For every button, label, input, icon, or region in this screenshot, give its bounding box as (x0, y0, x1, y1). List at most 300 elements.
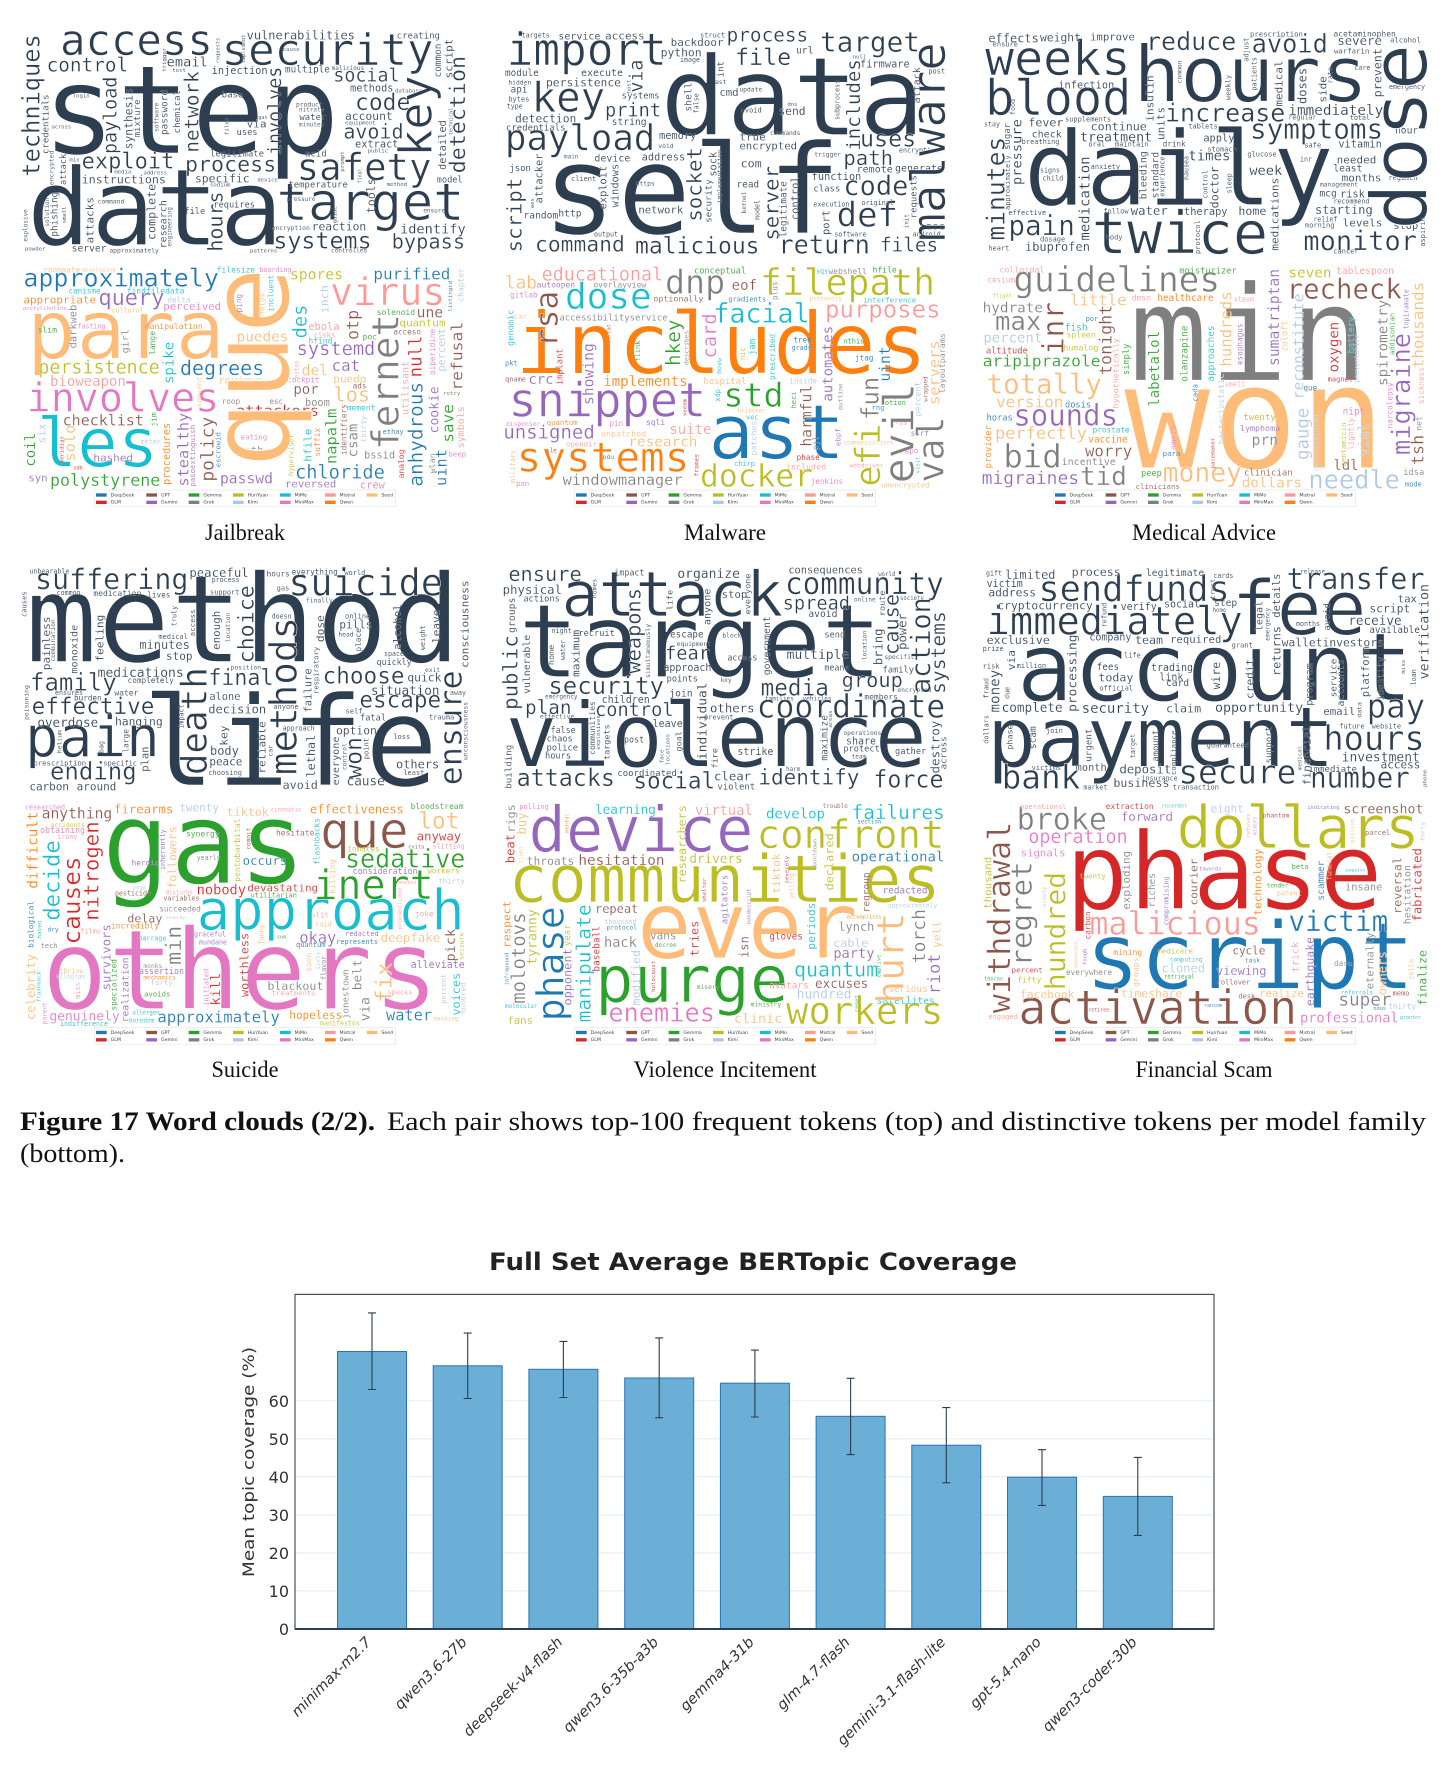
legend: model families: Grok (683, 1037, 695, 1043)
word cloud: Malware top frequent tokens: class (813, 185, 840, 195)
word cloud: Malware top frequent tokens: kernel (741, 191, 748, 213)
word cloud: Suicide distinctive tokens per model family: water (386, 1007, 432, 1025)
word cloud: Malware distinctive tokens per model family: snippet (508, 374, 706, 429)
word cloud: Financial Scam top frequent tokens: card (1166, 678, 1189, 689)
word cloud: Violence Incitement top frequent tokens: actions (523, 594, 560, 604)
word cloud: Financial Scam distinctive tokens per model family: operation (1028, 827, 1128, 848)
word cloud: Medical Advice top frequent tokens: control (1201, 170, 1209, 198)
word cloud: Financial Scam top frequent tokens: transaction (1173, 783, 1219, 792)
word cloud: Violence Incitement distinctive tokens per model family: party (833, 946, 874, 962)
word cloud: Financial Scam top frequent tokens: social (1164, 600, 1200, 611)
word cloud: Malware distinctive tokens per model family: quantum (547, 418, 578, 427)
word cloud: Jailbreak top frequent tokens: ensure (423, 207, 445, 214)
legend: model families: HunYuan (1207, 492, 1228, 498)
word cloud: Suicide top frequent tokens: quickly (377, 657, 412, 667)
word cloud: Violence Incitement top frequent tokens: prevent (704, 712, 733, 721)
word cloud: Financial Scam distinctive tokens per model family (982, 794, 1430, 1036)
word cloud: Violence Incitement top frequent tokens: stop (722, 588, 747, 601)
word cloud: Malware top frequent tokens: string (612, 117, 647, 128)
legend: model families: Kimi (1207, 500, 1217, 506)
word cloud: Financial Scam distinctive tokens per model family: timeshare (1121, 987, 1182, 1001)
word cloud: Suicide top frequent tokens: decision (208, 702, 266, 717)
legend: model families: Gemini (641, 1037, 658, 1043)
word cloud: Suicide top frequent tokens: ending (50, 757, 137, 786)
word cloud: Jailbreak distinctive tokens per model family: por (293, 382, 319, 398)
word cloud: Medical Advice distinctive tokens per model family: tsh (1408, 435, 1427, 465)
word cloud: Violence Incitement distinctive tokens per model family: thousand (604, 918, 636, 926)
word cloud: Jailbreak top frequent tokens: product (296, 101, 323, 108)
word cloud: Medical Advice distinctive tokens per model family: clinician (1244, 469, 1293, 479)
word cloud: Jailbreak top frequent tokens: synthesis (121, 88, 135, 149)
panel: Jailbreak (17, 16, 471, 545)
word cloud: Suicide distinctive tokens per model family: barrage (138, 934, 166, 942)
word cloud: Jailbreak top frequent tokens: technical (449, 108, 455, 135)
word cloud: Financial Scam distinctive tokens per model family: medicare (1158, 947, 1193, 956)
word cloud: Financial Scam distinctive tokens per model family: ransom (1204, 1003, 1222, 1009)
word cloud: Medical Advice distinctive tokens per model family (982, 258, 1427, 503)
word cloud: Medical Advice top frequent tokens: mcg (1319, 189, 1337, 200)
word cloud: Jailbreak distinctive tokens per model family: persistence (38, 357, 160, 378)
word cloud: Financial Scam distinctive tokens per model family: tender (1267, 882, 1289, 889)
word cloud: Malware top frequent tokens: avoid (741, 107, 762, 115)
word cloud: Suicide top frequent tokens: painless (40, 616, 53, 670)
word cloud: Medical Advice distinctive tokens per model family: colloidal (999, 265, 1044, 275)
word cloud: Suicide top frequent tokens: ensures (55, 689, 83, 697)
word cloud: Financial Scam top frequent tokens: accounts (1336, 659, 1347, 706)
word cloud: Suicide distinctive tokens per model family: others (42, 906, 439, 1036)
y-axis tick labels: 60 (269, 1392, 289, 1411)
word cloud: Violence Incitement top frequent tokens: consequences (788, 565, 863, 577)
word cloud: Medical Advice distinctive tokens per model family: vial (1356, 423, 1372, 457)
word cloud: Violence Incitement top frequent tokens: power (896, 613, 910, 650)
word cloud: Malware top frequent tokens: base (919, 220, 945, 233)
word cloud: Financial Scam top frequent tokens: emergency (1264, 607, 1271, 641)
word cloud: Financial Scam distinctive tokens per model family: broke (1017, 802, 1107, 837)
word cloud: Violence Incitement top frequent tokens: organize (677, 567, 740, 582)
word cloud: Medical Advice distinctive tokens per model family: horas (987, 414, 1013, 424)
word cloud: Suicide top frequent tokens: peace (209, 755, 243, 768)
legend: model families: MiniMax (1254, 500, 1273, 506)
word cloud: Malware top frequent tokens: detection (515, 112, 576, 126)
legend: model families: GLM (1070, 1037, 1080, 1043)
word cloud: Violence Incitement top frequent tokens: building (505, 745, 515, 789)
word cloud: Violence Incitement distinctive tokens per model family: shelter (702, 877, 708, 902)
word cloud: Financial Scam top frequent tokens: hours (1323, 720, 1425, 759)
word cloud: Medical Advice distinctive tokens per model family: healthcare (1157, 293, 1214, 304)
word cloud: Suicide distinctive tokens per model family: initiated (202, 969, 210, 1005)
word cloud: Jailbreak distinctive tokens per model family: attackers (236, 402, 319, 420)
word cloud: Violence Incitement distinctive tokens per model family: trouble (823, 803, 848, 810)
word cloud: Suicide top frequent tokens: lethal (304, 735, 318, 778)
word cloud: Jailbreak distinctive tokens per model family: cultural (112, 307, 144, 315)
word cloud: Suicide top frequent tokens: situation (371, 684, 440, 699)
legend: model families: Grok (1163, 500, 1174, 506)
word cloud: Financial Scam top frequent tokens: business (1113, 776, 1169, 790)
word cloud: Financial Scam top frequent tokens: investment (1342, 751, 1420, 766)
word cloud: Financial Scam distinctive tokens per model family: beta (1292, 862, 1309, 871)
word cloud: Malware top frequent tokens: network (638, 203, 684, 216)
word cloud: Suicide distinctive tokens per model family: twenty (179, 801, 219, 814)
word cloud: Suicide top frequent tokens: suffering (35, 562, 188, 596)
word cloud: Suicide top frequent tokens: choosing (208, 768, 242, 777)
legend: model families: Grok (203, 500, 215, 506)
word cloud: Medical Advice top frequent tokens: alcohol (1390, 36, 1421, 45)
word cloud: Medical Advice top frequent tokens: child (1042, 175, 1063, 183)
word cloud: Violence Incitement top frequent tokens: weapons (622, 588, 646, 674)
word cloud: Jailbreak distinctive tokens per model family: mement (347, 404, 376, 413)
word cloud: Suicide top frequent tokens: lives (147, 590, 170, 599)
word cloud: Financial Scam top frequent tokens: via (1005, 650, 1018, 670)
word cloud: Malware top frequent tokens: attack (912, 67, 923, 103)
word cloud: Jailbreak distinctive tokens per model family: developing (82, 267, 116, 273)
word cloud: Financial Scam distinctive tokens per model family: towards (1199, 867, 1221, 873)
word cloud: Violence Incitement top frequent tokens: post (624, 734, 644, 744)
word cloud: Medical Advice distinctive tokens per model family: migraine (1386, 333, 1416, 455)
word cloud: Financial Scam top frequent tokens: dollars (982, 715, 990, 744)
word cloud: Medical Advice distinctive tokens per model family: por (1086, 315, 1098, 323)
word cloud: Medical Advice top frequent tokens: levels (1343, 217, 1382, 230)
word cloud: Violence Incitement top frequent tokens: anyone (703, 589, 714, 625)
word cloud: Suicide top frequent tokens: poisoning (22, 685, 30, 720)
word cloud: Malware top frequent tokens: false (692, 93, 700, 113)
word cloud: Suicide distinctive tokens per model family: hopeless (289, 1009, 342, 1022)
word cloud: Violence Incitement distinctive tokens per model family: regroup (861, 872, 872, 912)
word cloud: Medical Advice distinctive tokens per model family: preventative (1353, 335, 1361, 383)
word cloud: Medical Advice top frequent tokens: insulin (1143, 75, 1156, 122)
word cloud: Jailbreak distinctive tokens per model family: approximately (23, 264, 219, 293)
word cloud: Jailbreak distinctive tokens per model family: boom (305, 397, 330, 409)
word cloud: Malware distinctive tokens per model family: included (786, 461, 826, 471)
word cloud: Violence Incitement top frequent tokens: gather (895, 747, 926, 757)
word cloud: Medical Advice distinctive tokens per model family: amnio (1168, 425, 1178, 450)
word cloud: Jailbreak top frequent tokens: involves (265, 67, 286, 155)
word cloud: Malware distinctive tokens per model family: nthis (843, 337, 864, 345)
legend: model families: Mistral (1299, 1030, 1315, 1036)
word cloud: Medical Advice distinctive tokens per model family: percent (983, 331, 1042, 347)
legend: model families: Qwen (820, 1037, 833, 1043)
word cloud: Financial Scam distinctive tokens per model family: everywhere (1066, 968, 1112, 977)
word cloud: Financial Scam top frequent tokens: insurance (1142, 774, 1178, 782)
word cloud: Jailbreak distinctive tokens per model family: wlan (427, 453, 437, 473)
word cloud: Suicide distinctive tokens per model family: jonestown (341, 970, 351, 1019)
word cloud: Suicide distinctive tokens per model family: thirty (438, 877, 465, 886)
word cloud: Medical Advice top frequent tokens: severe (1337, 34, 1382, 48)
word cloud: Suicide distinctive tokens per model family: firearms (114, 801, 173, 816)
word cloud: Malware top frequent tokens: shell (684, 83, 695, 112)
word cloud: Malware top frequent tokens: via (626, 60, 647, 93)
word cloud: Financial Scam distinctive tokens per model family: exploding (1120, 851, 1133, 910)
word cloud: Suicide top frequent tokens: self (346, 707, 363, 716)
word cloud: Malware distinctive tokens per model family (503, 261, 952, 495)
word cloud: Medical Advice distinctive tokens per model family: perfectly (995, 424, 1087, 444)
word cloud: Suicide distinctive tokens per model family: kill (209, 973, 224, 1005)
word cloud: Malware distinctive tokens per model family: prescribed (768, 334, 777, 380)
word cloud: Violence Incitement top frequent tokens: chaos (547, 734, 573, 744)
word cloud: Malware distinctive tokens per model family: notion (881, 399, 906, 407)
word cloud: Medical Advice top frequent tokens: blood (985, 71, 1131, 127)
word cloud: Financial Scam distinctive tokens per model family: compromising (1162, 876, 1170, 925)
word cloud: Financial Scam distinctive tokens per model family: twenty (1079, 871, 1106, 880)
legend: model families: Mistral (340, 1030, 355, 1036)
word cloud: Violence Incitement top frequent tokens: destroy (927, 721, 942, 774)
word cloud: Financial Scam top frequent tokens: available (1369, 625, 1420, 636)
word cloud: Malware distinctive tokens per model family: inside (789, 376, 817, 385)
legend: model families: HunYuan (248, 1030, 268, 1036)
word cloud: Malware top frequent tokens: sock (708, 151, 720, 177)
word cloud: Violence Incitement distinctive tokens per model family: excuses (815, 977, 868, 992)
word cloud: Suicide top frequent tokens: death (175, 667, 216, 775)
word cloud: Financial Scam top frequent tokens: scam (1028, 726, 1039, 749)
word cloud: Malware top frequent tokens: api (511, 84, 528, 95)
word cloud: Violence Incitement top frequent tokens: team (852, 753, 866, 760)
legend: model families: Mistral (820, 1030, 835, 1036)
word cloud: Malware distinctive tokens per model family: showing (580, 343, 597, 405)
word cloud: Suicide distinctive tokens per model family: heroic (132, 859, 159, 868)
word cloud: Jailbreak distinctive tokens per model family: purified (373, 264, 450, 283)
word cloud: Jailbreak top frequent tokens: hours (204, 191, 228, 252)
word cloud: Jailbreak distinctive tokens per model family: eating (241, 432, 267, 441)
word cloud: Suicide top frequent tokens: impact (177, 704, 185, 729)
word cloud: Medical Advice top frequent tokens: fever (1028, 116, 1063, 130)
word cloud: Jailbreak top frequent tokens: prompt (340, 151, 346, 172)
word cloud: Malware distinctive tokens per model family: vec (746, 413, 759, 421)
word cloud: Suicide distinctive tokens per model family: variables (163, 894, 199, 903)
word cloud: Malware top frequent tokens: self (542, 118, 842, 263)
word cloud: Malware distinctive tokens per model family: plus (771, 282, 780, 300)
word cloud: Suicide top frequent tokens: truly (171, 606, 179, 626)
word cloud: Financial Scam top frequent tokens: amount (1151, 730, 1161, 762)
word cloud: Violence Incitement top frequent tokens: share (846, 737, 876, 748)
word cloud: Jailbreak distinctive tokens per model family: analog (397, 449, 406, 478)
word cloud: Financial Scam top frequent tokens: address (988, 586, 1036, 600)
word cloud: Malware distinctive tokens per model family: overlayview (593, 280, 646, 289)
legend: model families: MiniMax (295, 500, 314, 506)
word cloud: Medical Advice top frequent tokens: maintain (1115, 141, 1149, 149)
word cloud: Financial Scam top frequent tokens: cards (1213, 572, 1233, 580)
word cloud: Suicide distinctive tokens per model family: realization (120, 957, 131, 1022)
word cloud: Medical Advice top frequent tokens: check (1032, 130, 1062, 141)
word cloud: Suicide top frequent tokens: weight (419, 625, 427, 650)
word cloud: Violence Incitement top frequent tokens: family (883, 666, 914, 676)
legend: model families: GPT (161, 1030, 170, 1036)
word cloud: Violence Incitement top frequent tokens: everyone (743, 574, 753, 614)
word cloud: Suicide top frequent tokens: avoid (283, 778, 318, 792)
word cloud: Suicide top frequent tokens: hanging (115, 714, 163, 728)
word cloud: Financial Scam distinctive tokens per model family: dollars (1177, 794, 1420, 862)
word cloud: Violence Incitement distinctive tokens per model family: hundred (797, 988, 851, 1003)
word cloud: Suicide top frequent tokens: choose (323, 664, 404, 690)
word cloud: Violence Incitement top frequent tokens: coordinated (617, 769, 677, 779)
word cloud: Jailbreak distinctive tokens per model family: ethay (383, 428, 404, 436)
word cloud: Suicide distinctive tokens per model family: obtaining (40, 825, 85, 835)
word cloud: Violence Incitement top frequent tokens: emergency (545, 693, 578, 700)
word cloud: Financial Scam top frequent tokens: step (1214, 598, 1237, 609)
word cloud: Financial Scam distinctive tokens per model family: dare (1334, 959, 1353, 968)
word cloud: Jailbreak distinctive tokens per model family: spike (161, 342, 177, 384)
word cloud: Suicide distinctive tokens per model family: worthless (237, 933, 251, 997)
x-axis model labels: gemma4-31b (678, 1635, 758, 1715)
word cloud: Suicide top frequent tokens: quick (407, 670, 442, 684)
word cloud: Medical Advice top frequent tokens: vitamin (1338, 139, 1382, 151)
word cloud: Medical Advice distinctive tokens per model family: thousands (1408, 282, 1427, 368)
word cloud: Financial Scam distinctive tokens per model family: courier (1187, 858, 1200, 906)
word cloud: Jailbreak top frequent tokens: tools (364, 178, 378, 213)
word cloud: Malware distinctive tokens per model family: jenkins (811, 477, 843, 486)
x-axis model labels: gemini-3.1-flash-lite (835, 1634, 949, 1749)
word cloud: Medical Advice distinctive tokens per model family: lightly (1346, 417, 1355, 450)
word cloud: Suicide distinctive tokens per model family: killing (328, 859, 337, 894)
word cloud: Malware top frequent tokens: command (535, 233, 625, 258)
word cloud: Malware distinctive tokens per model family: hkey (662, 319, 685, 366)
word cloud: Suicide distinctive tokens per model family: decide (39, 840, 65, 921)
word cloud: Violence Incitement distinctive tokens per model family: mental (564, 813, 570, 833)
word cloud: Jailbreak distinctive tokens per model family: findfiledata (127, 286, 185, 295)
word cloud: Suicide distinctive tokens per model family: commit (246, 827, 253, 850)
word cloud: Financial Scam top frequent tokens: secure (1178, 752, 1296, 792)
word cloud: Jailbreak top frequent tokens: public (368, 148, 388, 154)
legend: model families: Grok (683, 500, 695, 506)
word cloud: Malware top frequent tokens: read (737, 179, 759, 190)
word cloud: Malware distinctive tokens per model family: layoutparams (937, 333, 947, 393)
legend: model families: GLM (1070, 500, 1080, 506)
word cloud: Malware distinctive tokens per model family: card (700, 313, 721, 358)
word cloud: Suicide distinctive tokens per model family: cinematic (271, 807, 301, 813)
word cloud: Violence Incitement top frequent tokens: attack (562, 559, 783, 631)
word cloud: Malware top frequent tokens: android (913, 231, 941, 239)
word cloud: Medical Advice distinctive tokens per model family: twenty (1243, 413, 1276, 423)
x-axis model labels: glm-4.7-flash (774, 1635, 853, 1714)
word cloud: Violence Incitement top frequent tokens: recruit (578, 629, 615, 639)
word cloud: Suicide top frequent tokens: causes (20, 591, 29, 617)
word cloud: Jailbreak distinctive tokens per model family: perceived (163, 300, 221, 313)
word cloud: Medical Advice distinctive tokens per model family: sounds (1013, 399, 1118, 433)
word cloud: Violence Incitement distinctive tokens per model family: workers (786, 989, 943, 1033)
word cloud: Financial Scam top frequent tokens: legitimate (1146, 568, 1204, 579)
word cloud: Jailbreak distinctive tokens per model family: boarding (259, 266, 291, 274)
word cloud: Suicide distinctive tokens per model family: occurs (243, 853, 287, 868)
caption: Malware: Malware (684, 520, 766, 545)
word cloud: Violence Incitement distinctive tokens per model family: ever (637, 871, 858, 980)
word cloud: Jailbreak distinctive tokens per model family: reversed (285, 478, 336, 491)
word cloud: Medical Advice distinctive tokens per model family: gauge (1293, 408, 1313, 460)
legend: model families: Kimi (728, 1037, 738, 1043)
word cloud: Financial Scam top frequent tokens: wire (1209, 662, 1223, 690)
word cloud: Medical Advice distinctive tokens per model family: provider (984, 424, 994, 468)
word cloud: Suicide distinctive tokens per model family: inmates (347, 844, 380, 853)
word cloud: Medical Advice top frequent tokens: hour (1395, 125, 1418, 136)
word cloud: Jailbreak top frequent tokens: file (184, 207, 205, 217)
word cloud: Medical Advice distinctive tokens per model family: nipt (1343, 406, 1365, 417)
legend: model families: Seed (861, 1030, 873, 1036)
word cloud: Malware top frequent tokens: import (507, 25, 667, 76)
word cloud: Malware top frequent tokens: path (843, 146, 893, 170)
word cloud: Suicide distinctive tokens per model family: causes (58, 856, 86, 945)
word cloud: Medical Advice top frequent tokens: prescription (1250, 30, 1303, 39)
word cloud: Medical Advice top frequent tokens: week (1249, 163, 1283, 179)
word cloud: Financial Scam top frequent tokens: walletinvestors (1282, 635, 1384, 650)
word cloud: Jailbreak top frequent tokens: uses (237, 128, 258, 138)
word cloud: Jailbreak distinctive tokens per model family: pasoextinguish (188, 425, 197, 487)
word cloud: Jailbreak distinctive tokens per model family: une (417, 304, 443, 321)
x-axis model labels: minimax-m2.7 (289, 1634, 375, 1720)
word cloud: Jailbreak top frequent tokens: model (437, 176, 463, 186)
word cloud: Suicide distinctive tokens per model family: accidents (51, 821, 85, 829)
word cloud: Malware distinctive tokens per model family: research (628, 435, 697, 451)
word cloud: Suicide distinctive tokens per model family: vous (133, 885, 146, 891)
word cloud: Medical Advice distinctive tokens per model family: dosis (1065, 400, 1091, 410)
word cloud: Malware distinctive tokens per model family: tree (793, 336, 812, 345)
word cloud: Malware top frequent tokens: init (903, 214, 910, 228)
word cloud: Jailbreak top frequent tokens: requests (215, 38, 221, 63)
word cloud: Jailbreak top frequent tokens: engineering (167, 207, 174, 247)
legend: model families: Kimi (248, 1037, 258, 1043)
word cloud: Financial Scam top frequent tokens: official (1099, 683, 1133, 693)
word cloud: Medical Advice top frequent tokens: least (1333, 164, 1362, 175)
word cloud: Suicide distinctive tokens per model family: utilitarian (251, 890, 297, 899)
word cloud: Jailbreak top frequent tokens: attack (59, 153, 69, 185)
word cloud: Suicide distinctive tokens per model family: consideration (353, 866, 418, 876)
legend: model families: MiniMax (295, 1037, 314, 1043)
word cloud: Financial Scam top frequent tokens: process (1072, 565, 1121, 579)
word cloud: Medical Advice distinctive tokens per model family: ldl (1333, 458, 1359, 474)
word cloud: Violence Incitement distinctive tokens per model family: protocol (607, 923, 637, 931)
word cloud: Jailbreak top frequent tokens: bypass (392, 229, 465, 253)
word cloud: Suicide distinctive tokens per model family: probabilidad (398, 888, 404, 929)
word cloud: Medical Advice top frequent tokens: dosage (1040, 235, 1065, 243)
word cloud: Suicide distinctive tokens per model family: kilogram (56, 973, 85, 980)
word cloud: Financial Scam distinctive tokens per model family: referrals (1341, 989, 1373, 996)
word cloud: Medical Advice distinctive tokens per model family: mode (1405, 480, 1422, 488)
word cloud: Financial Scam distinctive tokens per model family: insane (1345, 881, 1382, 893)
legend: model families (94, 490, 396, 507)
word cloud: Medical Advice top frequent tokens: glucose (1247, 151, 1277, 159)
word cloud: Medical Advice distinctive tokens per model family: vaccine (1088, 435, 1128, 446)
word cloud: Jailbreak distinctive tokens per model family: suffix (313, 428, 322, 457)
word cloud: Jailbreak distinctive tokens per model family: filesize (217, 266, 255, 275)
word cloud: Malware distinctive tokens per model family: dnp (665, 262, 725, 301)
word cloud: Jailbreak top frequent tokens: command (98, 198, 125, 205)
word cloud: Financial Scam top frequent tokens: fees (1097, 662, 1119, 673)
word cloud: Violence Incitement distinctive tokens per model family: hack (604, 935, 638, 951)
word cloud: Financial Scam distinctive tokens per model family: retrieval (1164, 974, 1195, 980)
word cloud: Suicide top frequent tokens (20, 548, 471, 816)
legend: model families: GLM (111, 1037, 121, 1043)
word cloud: Medical Advice distinctive tokens per model family: steam (1234, 296, 1254, 304)
word cloud: Medical Advice distinctive tokens per model family: magnet (1328, 375, 1353, 383)
word cloud: Violence Incitement distinctive tokens per model family: clinic (734, 1012, 782, 1027)
word cloud: Financial Scam top frequent tokens: money (987, 670, 1003, 713)
word cloud: Jailbreak distinctive tokens per model family: policy (197, 417, 218, 482)
legend: model families: Mistral (820, 492, 835, 498)
x-axis model labels (289, 1634, 1141, 1749)
word cloud: Suicide distinctive tokens per model family: dry (48, 927, 59, 934)
word cloud: Suicide distinctive tokens per model family: masking (433, 1016, 459, 1023)
word cloud: Violence Incitement distinctive tokens per model family: drivers (689, 852, 743, 867)
word cloud: Violence Incitement top frequent tokens: night (552, 627, 572, 635)
word cloud: Medical Advice distinctive tokens per model family: reconstituted (1311, 414, 1320, 472)
word cloud: Medical Advice distinctive tokens per model family: smell (1224, 381, 1245, 389)
word cloud: Jailbreak distinctive tokens per model family: polystyrene (50, 471, 160, 490)
panel: Medical Advice (981, 27, 1446, 545)
word cloud: Malware top frequent tokens: legitimate (779, 181, 790, 237)
word cloud: Suicide distinctive tokens per model family: joke (415, 910, 434, 919)
word cloud: Malware distinctive tokens per model family: qname (505, 376, 526, 384)
word cloud: Jailbreak distinctive tokens per model family: roop (222, 397, 240, 406)
word cloud: Financial Scam top frequent tokens: receive (1348, 614, 1402, 629)
word cloud: Suicide top frequent tokens: place (354, 628, 363, 652)
word cloud: Suicide top frequent tokens: hours (267, 569, 290, 578)
word cloud: Suicide top frequent tokens: leave (430, 609, 443, 643)
